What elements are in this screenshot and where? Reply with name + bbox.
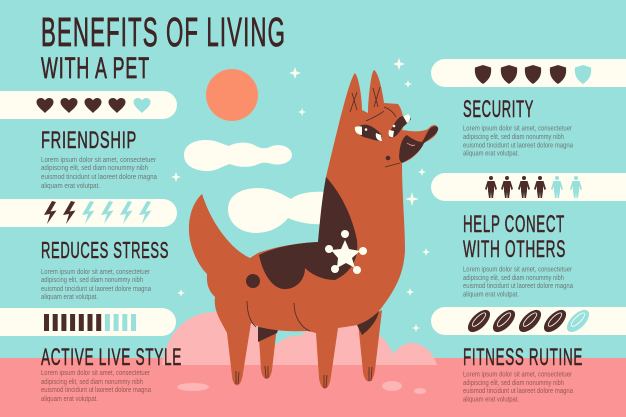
text: fitness routine: euismod tincidunt ut laoreet dolore magna bbox=[463, 386, 574, 395]
text: active live style: euismod tincidunt ut laoreet dolore magna bbox=[41, 385, 152, 394]
bar: fitness bbox=[431, 307, 626, 335]
title: BENEFITS OF LIVING bbox=[41, 9, 286, 55]
text: help connect: euismod tincidunt ut laoreet dolore magna bbox=[463, 281, 574, 290]
text: active live style: adipiscing elit, sed diam nonummy nibh bbox=[41, 377, 143, 386]
icons: shields bbox=[475, 65, 591, 84]
icons: people bbox=[485, 176, 582, 198]
dog: neck dot bbox=[386, 156, 390, 160]
text: fitness routine: Lorem ipsum dolor sit amet, consectetuer bbox=[463, 370, 572, 378]
cloud: lower bbox=[228, 188, 326, 233]
dog: leg and toe lines bbox=[236, 87, 400, 388]
bar: security bbox=[431, 59, 626, 87]
text: reduces stress: adipiscing elit, sed diam nonummy nibh bbox=[41, 275, 143, 284]
text: friendship bbox=[41, 155, 158, 190]
icons: energy bars bbox=[44, 314, 136, 331]
text: help connect: adipiscing elit, sed diam nonummy nibh bbox=[463, 273, 564, 282]
text: help connect bbox=[463, 264, 574, 298]
text: reduces stress bbox=[41, 267, 152, 301]
text: reduces stress: euismod tincidunt ut laoreet dolore magna bbox=[41, 284, 152, 293]
heading: reduces stress: REDUCES STRESS bbox=[41, 237, 169, 263]
bar: friendship bbox=[0, 91, 177, 119]
text: security: Lorem ipsum dolor sit amet, consectetuer bbox=[463, 124, 572, 132]
heading: friendship: FRIENDSHIP bbox=[41, 127, 137, 154]
sparkles bbox=[171, 58, 430, 332]
text: security: adipiscing elit, sed diam nonummy nibh bbox=[463, 132, 564, 141]
text: help connect: aliquam erat volutpat. bbox=[463, 290, 519, 298]
hills bbox=[162, 312, 437, 365]
bar: active bbox=[0, 308, 176, 336]
title bbox=[41, 9, 286, 85]
ground ellipses bbox=[177, 381, 426, 394]
text: fitness routine: adipiscing elit, sed diam nonummy nibh bbox=[463, 378, 564, 387]
dog: far legs bbox=[258, 310, 382, 382]
text: reduces stress: Lorem ipsum dolor sit amet, consectetuer bbox=[41, 267, 150, 276]
text: active live style: aliquam erat volutpat. bbox=[41, 394, 98, 403]
text: security: aliquam erat volutpat. bbox=[463, 148, 519, 158]
dog: right eye bbox=[389, 114, 411, 138]
heading: active live style: ACTIVE LIVE STYLE bbox=[41, 344, 182, 371]
cloud: upper bbox=[184, 140, 292, 171]
text: security: euismod tincidunt ut laoreet dolore magna bbox=[463, 140, 574, 150]
bar: stress bbox=[0, 199, 177, 227]
text: friendship: euismod tincidunt ut laoreet dolore magna bbox=[41, 172, 158, 181]
icons: hearts bbox=[36, 98, 150, 113]
dog: body and head bbox=[189, 70, 438, 389]
title: WITH A PET bbox=[41, 52, 150, 85]
text: fitness routine bbox=[463, 370, 574, 404]
dog: brown back patch bbox=[259, 177, 357, 289]
bar: connect bbox=[431, 173, 626, 201]
text: active live style: Lorem ipsum dolor sit amet, consectetuer bbox=[41, 368, 150, 377]
heading: help connect with others bbox=[463, 211, 566, 263]
sheriff badge bbox=[325, 230, 367, 274]
text: friendship: Lorem ipsum dolor sit amet, consectetuer bbox=[41, 155, 156, 164]
text: friendship: aliquam erat volutpat. bbox=[41, 181, 100, 190]
heading: security: SECURITY bbox=[463, 96, 534, 123]
dog: hip spot bbox=[246, 274, 260, 288]
text: fitness routine: aliquam erat volutpat. bbox=[463, 394, 519, 404]
ground bbox=[0, 358, 626, 417]
text: active live style bbox=[41, 368, 152, 403]
dog: muzzle patch bbox=[399, 126, 438, 163]
icons: bolts bbox=[44, 201, 152, 224]
text: friendship: adipiscing elit, sed diam nonummy nibh bbox=[41, 163, 148, 172]
dog: left eye bbox=[355, 125, 382, 141]
sun bbox=[206, 69, 258, 121]
text: security bbox=[463, 124, 574, 158]
dog bbox=[189, 70, 438, 389]
text: help connect: Lorem ipsum dolor sit amet, consectetuer bbox=[463, 264, 572, 274]
icons: weight discs bbox=[464, 306, 593, 336]
dog: muzzle highlight bbox=[407, 143, 415, 145]
text: reduces stress: aliquam erat volutpat. bbox=[41, 292, 98, 301]
